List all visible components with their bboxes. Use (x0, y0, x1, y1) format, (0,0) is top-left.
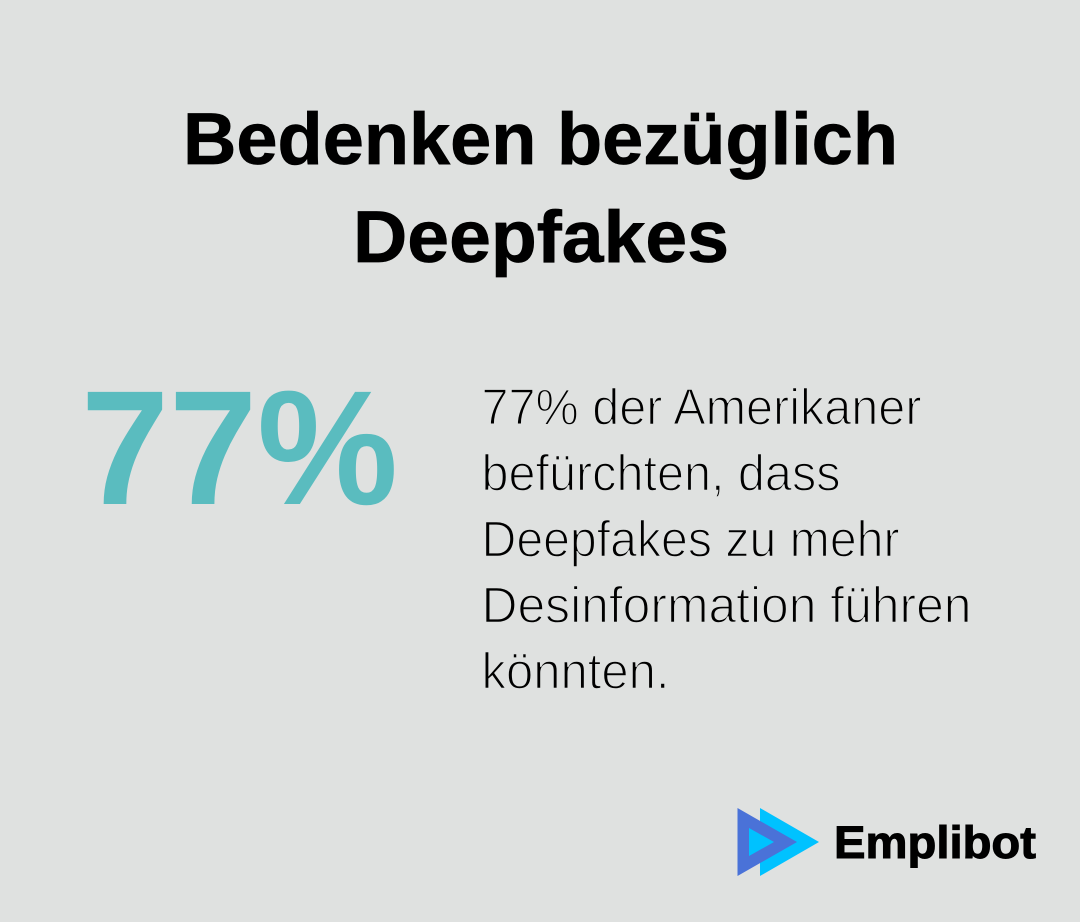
description text: Deepfakes zu mehr (482, 510, 900, 568)
logo wordmark: Emplibot (834, 817, 1036, 868)
icon: play triangles (738, 808, 819, 876)
description text (482, 378, 972, 700)
logo: Emplibot (738, 808, 1036, 876)
big statistic: 77%: 77% (81, 356, 398, 539)
title: Deepfakes (353, 197, 729, 278)
description text: könnten. (482, 642, 670, 700)
description text: befürchten, dass (482, 444, 840, 502)
description text: 77% der Amerikaner (482, 378, 922, 436)
description text: Desinformation führen (482, 576, 972, 634)
title (183, 99, 898, 278)
title: Bedenken bezüglich (183, 99, 898, 180)
